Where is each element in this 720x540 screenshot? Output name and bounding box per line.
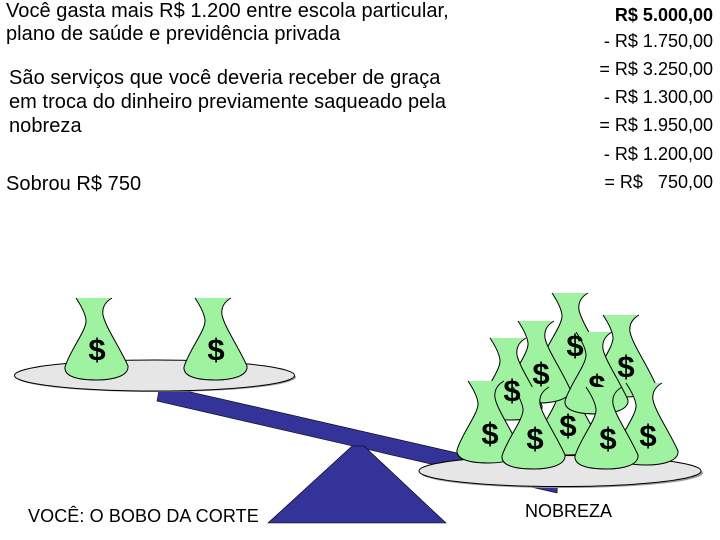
right money bags: $ — [481, 416, 499, 451]
calculation column: = R$ 1.950,00 — [599, 115, 713, 135]
text block: services: em troca do dinheiro previamente saqueado pela — [9, 91, 446, 113]
text block: services — [9, 67, 446, 137]
right money bags: $ — [599, 421, 617, 456]
calculation column: - R$ 1.750,00 — [604, 31, 713, 51]
left money bags: $ — [207, 332, 225, 367]
right money bags: $ — [617, 349, 635, 384]
right money bags: $ — [526, 421, 544, 456]
right money bags: $ — [503, 373, 521, 408]
left money bags — [65, 298, 247, 380]
calculation column: = R$ 750,00 — [604, 172, 713, 192]
text block: spending: plano de saúde e previdência privada — [6, 23, 340, 45]
left money bags: $ — [88, 332, 106, 367]
label: you: VOCÊ: O BOBO DA CORTE — [28, 506, 259, 526]
calculation column: = R$ 3.250,00 — [599, 59, 713, 79]
left plate — [14, 360, 296, 392]
right plate — [419, 456, 703, 488]
calculation column: R$ 5.000,00 — [615, 5, 713, 25]
calculation column: - R$ 1.300,00 — [604, 87, 713, 107]
text block: remainder: Sobrou R$ 750 — [6, 173, 141, 195]
right money bags: $ — [532, 356, 550, 391]
right money bags: $ — [559, 408, 577, 443]
text block: services: nobreza — [9, 115, 82, 137]
text block: spending: Você gasta mais R$ 1.200 entre escola particular, — [6, 0, 449, 22]
scale beam — [157, 385, 558, 493]
label: nobility: NOBREZA — [525, 501, 612, 521]
right money bags — [457, 293, 678, 469]
right money bags: $ — [588, 368, 606, 403]
calculation column — [599, 5, 713, 192]
text block: spending — [6, 0, 449, 45]
calculation column: - R$ 1.200,00 — [604, 144, 713, 164]
scale fulcrum — [268, 446, 446, 523]
text block: services: São serviços que você deveria receber de graça — [9, 67, 440, 89]
right money bags: $ — [566, 328, 584, 363]
right money bags: $ — [639, 418, 657, 453]
